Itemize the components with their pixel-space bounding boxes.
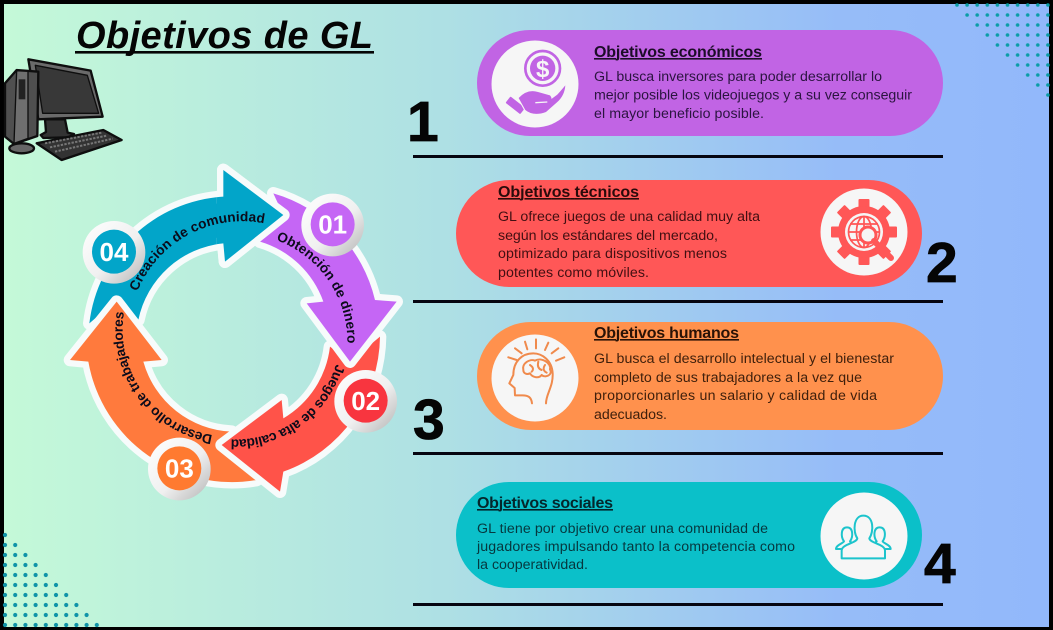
text block: mejor posible los videojuegos y a su vez conseguir — [594, 88, 912, 104]
heading: Objetivos técnicos — [498, 184, 639, 201]
text block: según los estándares del mercado, — [498, 228, 718, 244]
dot pattern bottom left — [0, 526, 109, 630]
text block: GL busca inversores para poder desarrollar lo — [594, 69, 882, 85]
label: desarrollo de trabajadores: Desarrollo de trabajadores — [113, 312, 212, 444]
panel: objetivos económicos — [477, 30, 943, 136]
label: obtención de dinero: Obtención de dinero — [278, 232, 355, 343]
text block — [498, 209, 760, 281]
badge 01 — [301, 194, 364, 256]
text block — [476, 521, 795, 573]
arrow: desarrollo de trabajadores — [70, 302, 257, 482]
panel: objetivos sociales — [456, 482, 922, 588]
dot pattern top right — [948, 0, 1051, 100]
number 3: 3 — [413, 388, 445, 452]
icon: hand holding coin: $ — [536, 56, 549, 83]
heading: Objetivos sociales — [477, 495, 613, 512]
number 4: 4 — [924, 532, 956, 596]
panel: objetivos técnicos — [456, 180, 922, 287]
badge 03 — [148, 438, 211, 500]
heading: Objetivos económicos — [594, 44, 762, 61]
number 2: 2 — [926, 231, 958, 295]
divider 1 — [413, 155, 943, 158]
text block: el mayor beneficio posible. — [594, 106, 764, 122]
panel: objetivos humanos — [477, 322, 943, 430]
badge 04: 04 — [100, 237, 129, 267]
text block: GL busca el desarrollo intelectual y el bienestar — [594, 351, 894, 367]
icon: head with brain — [492, 334, 578, 422]
text block: completo de sus trabajadores a la vez que — [594, 370, 862, 386]
title: Objetivos de GL — [76, 15, 373, 57]
text block: optimizado para dispositivos menos — [498, 246, 727, 262]
icon: desktop computer — [5, 59, 122, 160]
divider 4 — [413, 603, 943, 606]
text block: potentes como móviles. — [498, 265, 649, 281]
heading: Objetivos humanos — [594, 325, 739, 342]
divider 3 — [413, 452, 943, 455]
badge 04 — [83, 221, 145, 284]
arrow: obtención de dinero — [260, 193, 397, 362]
arrow: creación de comunidad — [89, 170, 283, 323]
arrow tip: creación de comunidad — [216, 164, 290, 268]
text block: la cooperatividad. — [477, 557, 588, 573]
text block: jugadores impulsando tanto la competencia como — [476, 539, 795, 555]
number 1: 1 — [407, 90, 439, 154]
text block — [594, 351, 894, 423]
divider 2 — [413, 300, 943, 303]
icon: group of people — [820, 492, 908, 580]
label: creación de comunidad: Creación de comunidad — [130, 211, 265, 290]
arrow: juegos de alta calidad — [222, 337, 380, 492]
cycle diagram — [64, 164, 403, 500]
icon: gear with globe and magnifier — [820, 188, 908, 276]
icon: hand holding coin — [492, 40, 578, 128]
badge 02: 02 — [351, 386, 380, 416]
badge 03: 03 — [165, 454, 194, 484]
badge 02 — [334, 370, 397, 433]
text block: proporcionarles un salario y calidad de vida — [594, 388, 877, 404]
text block: adecuados. — [594, 407, 667, 423]
label: juegos de alta calidad: Juegos de alta calidad — [232, 364, 344, 450]
text block: GL tiene por objetivo crear una comunidad de — [477, 521, 768, 537]
badge 01: 01 — [318, 210, 347, 240]
text block: GL ofrece juegos de una calidad muy alta — [498, 209, 760, 225]
text block — [594, 69, 912, 122]
